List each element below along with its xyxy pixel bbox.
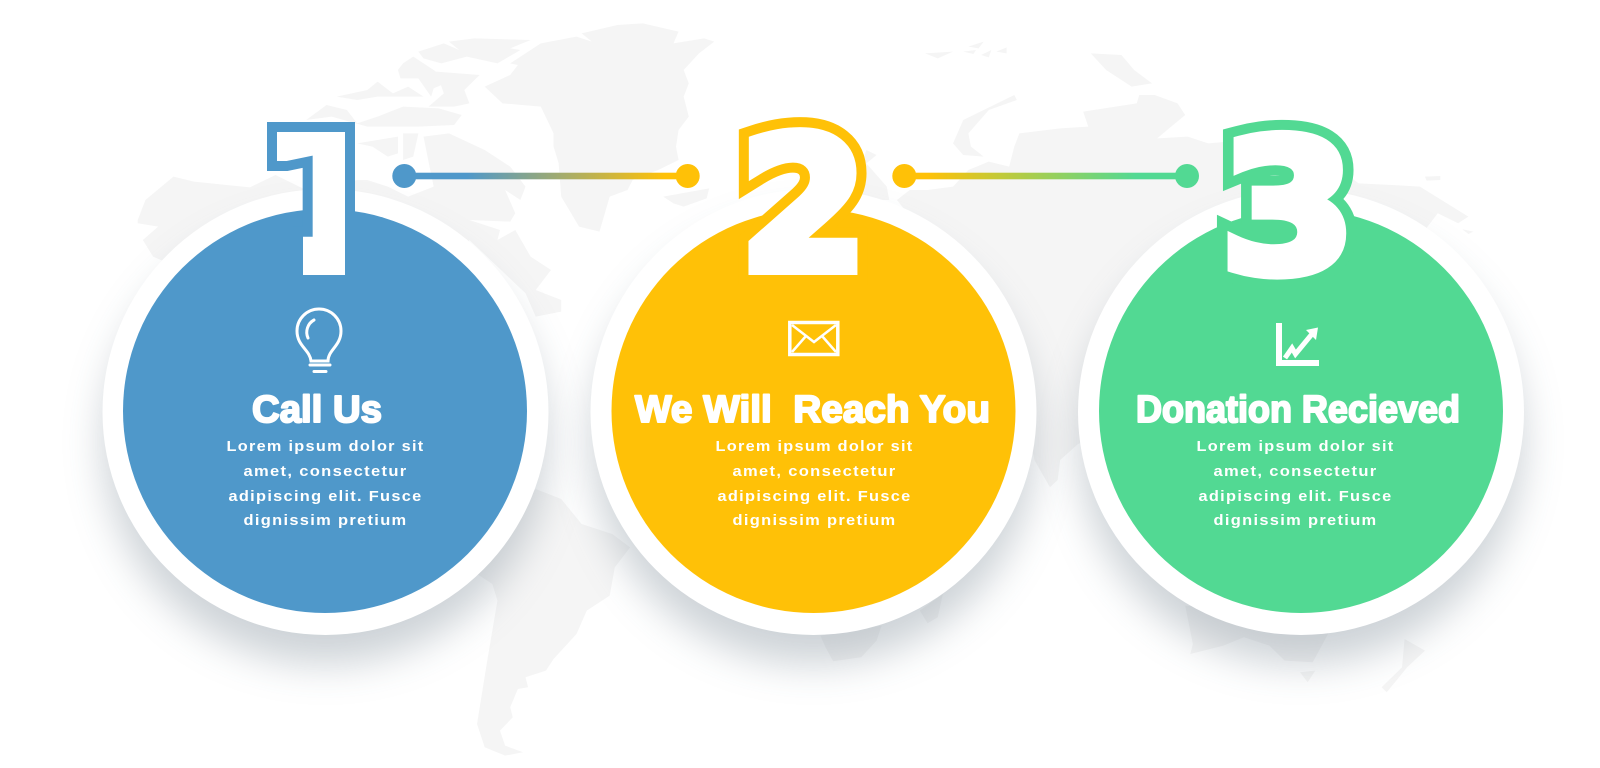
body text: Lorem ipsum dolor sit [716,438,914,455]
body text: amet, consectetur [244,463,408,480]
icon: envelope [790,322,838,354]
body text [1196,438,1394,529]
heading: Donation Recieved [1136,389,1460,431]
number 3: 3 [1221,103,1355,315]
number 1 [267,122,355,275]
number 2: 2 [740,100,867,313]
body text: adipiscing elit. Fusce [1198,488,1392,505]
body text: adipiscing elit. Fusce [228,488,422,505]
connector: step 2 to step 3 [892,164,1199,188]
number 1: 1 [261,77,407,322]
panel: step 2 We Will Reach You [590,100,1036,664]
panel: step 1 Call Us [102,77,548,664]
body text: Lorem ipsum dolor sit [1196,438,1394,455]
icon: growth chart [1276,323,1319,366]
body text: adipiscing elit. Fusce [718,488,912,505]
body text: dignissim pretium [732,512,896,529]
body text [226,438,424,529]
body text: dignissim pretium [1214,512,1378,529]
number 1: 1 [261,77,407,322]
heading: We Will Reach You [635,389,990,431]
number 3: 3 [1221,103,1355,315]
panel: step 3 Donation Recieved [1078,103,1524,664]
body text: amet, consectetur [732,463,896,480]
body text: Lorem ipsum dolor sit [226,438,424,455]
body text: amet, consectetur [1214,463,1378,480]
world map background [138,23,1473,756]
number 2: 2 [740,100,867,313]
icon: light bulb [297,309,341,372]
body text [716,438,914,529]
body text: dignissim pretium [244,512,408,529]
heading: Call Us [252,389,382,431]
connector: step 1 to step 2 [392,164,700,188]
